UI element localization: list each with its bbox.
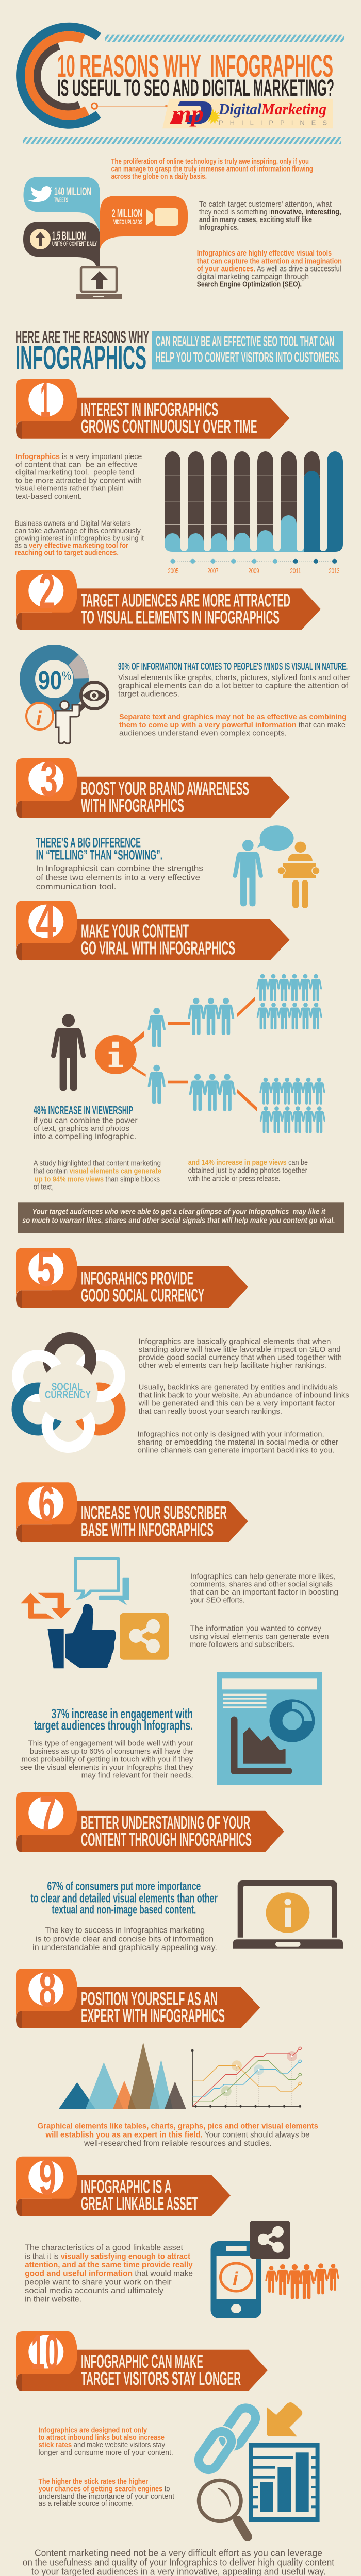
icon: magnifying glass [199, 2480, 248, 2537]
banner 4: 4 [36, 893, 56, 950]
banner 8: EXPERT WITH INFOGRAPHICS [81, 2005, 225, 2026]
icon: phone with share: i [233, 2268, 239, 2290]
bar chart: interest over time [165, 448, 343, 552]
text: reason 1 intro: visual elements rather than plain [15, 485, 124, 493]
icon: retweet arrows [21, 1593, 71, 1619]
text: stick rates: understand the importance of your content [38, 2493, 174, 2501]
banner 9: 9 [39, 2149, 56, 2206]
text: inbound links [38, 2427, 173, 2457]
text: study right column: and 14% increase in page views can be [188, 1159, 308, 1167]
text: stick rates: The higher the stick rates the higher [38, 2478, 148, 2486]
text: stick rates [38, 2478, 174, 2508]
text: separate text and graphics: audiences understand even complex concepts. [119, 730, 287, 738]
text: social signals: your SEO efforts. [190, 1597, 244, 1605]
banner 3: WITH INFOGRAPHICS [81, 795, 184, 816]
text: closing paragraph: Content marketing need not be a very difficult effort as you can leverage [35, 2548, 322, 2558]
donut chart: 90 percent: % [62, 669, 71, 682]
text: 90 percent visual [118, 660, 351, 699]
text: inbound links: stick rates and make website visitors stay [38, 2441, 166, 2449]
text: 37 percent engagement: This type of engagement will bode well with your [28, 1739, 193, 1748]
text: linkable asset: in their website. [25, 2295, 81, 2304]
text: 37 percent engagement: may find relevant for their needs. [81, 1772, 193, 1780]
text: study left column: A study highlighted that content marketing [34, 1159, 161, 1167]
diagram: social currency rings: SOCIAL [52, 1381, 83, 1393]
banner 6 [16, 1475, 248, 1542]
text: 67 percent of consumers: to clear and detailed visual elements than other [30, 1891, 218, 1905]
diagram: social currency rings: CURRENCY [45, 1389, 91, 1400]
text: 90 percent visual: target audiences. [118, 690, 179, 699]
text: telling vs showing: In Infographicsit can combine the strengths [36, 865, 203, 873]
line chart [191, 2047, 301, 2108]
text: catch attention: Infographics. [199, 224, 239, 232]
text: 90 percent visual: Visual elements like graphs, charts, pictures, stylized fonts and other [118, 674, 351, 682]
text: separate text and graphics: Separate text and graphics may not be as effective as combining [119, 713, 347, 721]
text: linkable asset [25, 2243, 193, 2304]
text: 67 percent of consumers: is to provide clear and concise bits of information [36, 1935, 214, 1943]
text: reason 1 intro: of content that can be an effective [15, 461, 137, 469]
banner 4 [16, 893, 290, 960]
icon: laptop upload [76, 267, 122, 299]
text: stick rates: your chances of getting search engines to [38, 2485, 170, 2494]
text: study right column [188, 1159, 308, 1183]
icon: laptop with info [233, 1880, 343, 1949]
timeline: 2009 [249, 567, 259, 575]
stat bubble: tweets [23, 177, 100, 234]
text: 48 percent viewership: if you can combine the power [34, 1116, 138, 1125]
banner 7: 7 [39, 1785, 56, 1841]
text: visual tools [197, 249, 342, 289]
stat bubble: content units: UNITS OF CONTENT DAILY [52, 240, 97, 247]
text: social currency paragraph 1: standing alone will have little favorable impact on SEO and [139, 1346, 341, 1354]
text: social currency paragraph 2: that link back to your website. An abundance of inbound links [139, 1392, 349, 1400]
text: followers [190, 1624, 329, 1649]
text: reason 1 detail: Business owners and Digital Marketers [15, 520, 131, 528]
text: followers: The information you wanted to convey [190, 1624, 322, 1633]
callout: target audiences [18, 1202, 344, 1233]
heading: here are the reasons why infographics: HERE ARE THE REASONS WHY [15, 328, 149, 346]
banner 8: 8 [39, 1961, 56, 2018]
text: 37 percent engagement: most probability of getting in touch with you if they [22, 1755, 193, 1764]
text: 48 percent viewership: into a compelling Infographic. [34, 1133, 136, 1141]
timeline: 2013 [329, 567, 339, 575]
text: linkable asset: The characteristics of a good linkable asset [25, 2243, 184, 2252]
banner 10 [16, 2324, 268, 2391]
banner 9: GREAT LINKABLE ASSET [81, 2193, 198, 2214]
text: reason 1 detail: reaching out to target audiences. [15, 549, 119, 557]
icon: down-left arrow [267, 2402, 302, 2436]
text: social currency paragraph 3: online channels can generate important backlinks to you. [137, 1446, 335, 1454]
timeline: 2005 [168, 567, 178, 575]
text: social currency paragraph 3: Infographics not only is designed with your information, [137, 1430, 324, 1438]
text: separate text and graphics: them to come up with a very powerful information that can make [119, 721, 346, 730]
text: visual tools: that can capture the attention and imagination [197, 258, 342, 266]
banner 6: 6 [38, 1475, 55, 1531]
text: social currency paragraph 2: Usually, backlinks are generated by entities and individuals [139, 1383, 338, 1392]
text: social currency paragraph 2: that can really boost your search rankings. [139, 1408, 282, 1416]
hatch bar top [105, 35, 344, 42]
text: study right column: with the article or press release. [188, 1175, 280, 1183]
stat bubble: tweets: 140 MILLION [54, 185, 91, 198]
text: graphical elements: Graphical elements like tables, charts, graphs, pics and other visual elements [38, 2122, 318, 2131]
icon: orange crowd [265, 2263, 339, 2299]
heading: here are the reasons why infographics [15, 328, 149, 377]
diagram: viral sharing network [51, 974, 325, 1133]
text: reason 1 intro: Infographics is a very important piece [15, 453, 142, 461]
banner 9: INFOGRAPHIC IS A [81, 2176, 172, 2197]
text: catch attention [199, 200, 341, 232]
text: followers: using visual elements can generate even [190, 1633, 329, 1641]
icon: person with magnifier eye and info [26, 682, 108, 743]
hatch bar lower [23, 137, 341, 144]
icon: bar report [249, 2443, 320, 2522]
banner 10: 10 [31, 2324, 59, 2380]
text: 67 percent of consumers: 67% of consumers put more importance [47, 1879, 201, 1893]
stat bubble: content units [23, 222, 100, 267]
text: 37 percent engagement: business as up to 60% of consumers will have the [30, 1748, 193, 1756]
text: study left column [34, 1159, 161, 1192]
diagram: social currency rings [18, 1338, 120, 1447]
text: social currency paragraph 2 [138, 1383, 349, 1416]
banner 5: INFOGRAHICS PROVIDE [81, 1267, 193, 1289]
text: linkable asset: good and useful information that would make [25, 2269, 193, 2278]
intro text: across the globe on a daily basis. [111, 173, 207, 181]
text: inbound links: longer and consume more of your content. [38, 2449, 173, 2457]
text: linkable asset: is that it is visually satisfying enough to attract [25, 2252, 190, 2261]
text: 48 percent viewership: 48% INCREASE IN VIEWERSHIP [34, 1104, 133, 1117]
banner 8 [16, 1961, 260, 2028]
banner 5 [16, 1241, 248, 1308]
text: stick rates: as a reliable source of income. [38, 2500, 134, 2508]
text: study left column: up to 94% more views than simple blocks [35, 1175, 160, 1183]
text: closing paragraph [23, 2548, 334, 2576]
text: 37 percent engagement [20, 1706, 193, 1780]
text: visual tools: Infographics are highly effective visual tools [197, 249, 332, 258]
text: social currency paragraph 1: other web elements can help facilitate higher rankings. [139, 1362, 326, 1370]
text: social signals: that can be an important factor in boosting [190, 1588, 338, 1597]
text: social signals: comments, shares and other social signals [190, 1581, 333, 1589]
banner 7 [16, 1785, 284, 1852]
banner 6: BASE WITH INFOGRAPHICS [81, 1519, 214, 1540]
text: telling vs showing: THERE’S A BIG DIFFERENCE [36, 835, 141, 850]
timeline: 2011 [290, 567, 301, 575]
title rings [21, 27, 99, 124]
text: 48 percent viewership [34, 1104, 138, 1141]
text: reason 1 intro [15, 453, 142, 501]
text: visual tools: digital marketing campaign through [197, 273, 309, 281]
text: telling vs showing: of these two elements into a very effective [36, 873, 200, 882]
banner 6: INCREASE YOUR SUBSCRIBER [81, 1502, 227, 1523]
logo: Digital Marketing Philippines: PHILIPPINES [219, 119, 327, 127]
text: social currency paragraph 2: will be generated and this can be a very important factor [138, 1399, 335, 1408]
icon: thumbs up [47, 1604, 116, 1668]
banner 8: POSITION YOURSELF AS AN [81, 1988, 218, 2009]
banner 5: 5 [37, 1241, 55, 1297]
text: reason 1 detail: can take advantage of this continuously [15, 527, 141, 535]
banner 1: 1 [40, 372, 50, 428]
text: visual tools: Search Engine Optimization (SEO). [197, 281, 302, 289]
text: social currency paragraph 3: sharing or embedding the material in social media or other [137, 1438, 338, 1447]
text: catch attention: and in many cases, exciting stuff like [199, 216, 312, 224]
icon: share tile [120, 1613, 169, 1660]
title [57, 48, 334, 101]
banner 3 [16, 751, 290, 818]
text: 37 percent engagement: target audiences through Infographs. [34, 1718, 193, 1733]
icon: two people talking [233, 825, 320, 908]
text: separate text and graphics [119, 713, 347, 738]
text: study left column: that contain visual elements can generate [34, 1167, 161, 1176]
text: graphical elements: well-researched from reliable resources and studies. [84, 2139, 272, 2148]
text: linkable asset: people want to share your work on their [25, 2278, 172, 2286]
banner 9 [16, 2149, 231, 2216]
logo: Digital Marketing Philippines: Digital [218, 100, 261, 118]
text: reason 1 detail [15, 520, 144, 557]
intro text: can manage to grasp the truly immense amount of information flowing [111, 165, 313, 174]
text: catch attention: To catch target customers' attention, what [199, 200, 332, 209]
text: inbound links: Infographics are designed not only [38, 2427, 147, 2435]
text: visual tools: of your audiences. As well as drive a successful [197, 265, 341, 274]
intro text: The proliferation of online technology is truly awe inspiring, only if you [111, 158, 309, 166]
banner 10: INFOGRAPHIC CAN MAKE [81, 2351, 203, 2372]
text: catch attention: they need is something innovative, interesting, [199, 208, 341, 216]
text: 67 percent of consumers [30, 1879, 218, 1952]
stat bubble: video uploads: VIDEO UPLOADS [113, 218, 142, 226]
stat bubble: video uploads: 2 MILLION [112, 207, 142, 220]
donut chart: 90 percent: 90 [38, 666, 62, 695]
text: study left column: of text, [34, 1183, 54, 1192]
text: inbound links: to attract inbound links but also increase [38, 2434, 165, 2442]
text: followers: more followers and subscribers. [190, 1641, 295, 1649]
icon: report document [217, 1672, 322, 1785]
text: social currency paragraph 1: provide good social currency that when used together with [139, 1353, 342, 1362]
text: social signals [190, 1572, 338, 1605]
timeline [168, 559, 339, 575]
text: closing paragraph: on the usefulness and quality of your Infographics to deliver high quality content [23, 2557, 334, 2567]
text: reason 1 intro: to be more attracted by content with [15, 477, 142, 485]
text: 37 percent engagement: see the visual elements in your Infographs that they [20, 1764, 193, 1772]
icon: chain link [195, 2404, 259, 2473]
stat bubble: video uploads [100, 196, 188, 249]
text: 67 percent of consumers: in understandable and graphically appealing way. [32, 1943, 217, 1952]
text: reason 1 detail: growing interest in Infographics by using it [15, 534, 144, 543]
text: linkable asset: attention, and at the same time provide really [25, 2261, 193, 2269]
banner 1 [16, 372, 290, 439]
icon: comment bubbles [74, 1557, 129, 1605]
icon: phone with share [210, 2221, 290, 2318]
banner 4: MAKE YOUR CONTENT [81, 920, 189, 941]
panel: seo tool callout [152, 331, 343, 369]
text: reason 1 intro: digital marketing tool. people tend [15, 469, 134, 477]
text: social currency paragraph 1 [139, 1337, 342, 1370]
text: telling vs showing [36, 835, 203, 891]
banner 3: 3 [40, 751, 58, 807]
stat bubble: tweets: TWEETS [54, 196, 68, 204]
callout: target audiences: Your target audiences who were able to get a clear glimpse of your Infographics may like it [32, 1208, 326, 1216]
text: 67 percent of consumers: The key to success in Infographics marketing [45, 1926, 205, 1935]
logo: Digital Marketing Philippines: Marketing [261, 100, 326, 118]
logo: Digital Marketing Philippines [162, 99, 333, 128]
text: 37 percent engagement: 37% increase in engagement with [52, 1706, 193, 1721]
banner 5: GOOD SOCIAL CURRENCY [81, 1284, 204, 1306]
text: reason 1 intro: text-based content. [15, 493, 82, 501]
text: social currency paragraph 1: Infographics are basically graphical elements that when [139, 1337, 331, 1346]
triangle chart [59, 2042, 186, 2109]
text: telling vs showing: communication tool. [36, 883, 116, 891]
icon: person with magnifier eye and info: i [36, 708, 42, 730]
timeline: 2007 [207, 567, 219, 575]
text: social currency paragraph 3 [137, 1430, 338, 1454]
logo: Digital Marketing Philippines: mp [172, 100, 204, 127]
pointer line to logo [92, 103, 168, 109]
text: 67 percent of consumers: textual and non-image based content. [52, 1903, 196, 1917]
banner 2 [16, 563, 321, 630]
heading: here are the reasons why infographics: INFOGRAPHICS [15, 339, 146, 377]
banner 1: INTEREST IN INFOGRAPHICS [81, 399, 218, 420]
banner 2: 2 [39, 563, 55, 619]
text: 90 percent visual: graphical elements can do a lot better to capture the attention of [118, 682, 349, 690]
text: telling vs showing: IN “TELLING” THAN “SHOWING”. [36, 847, 162, 862]
intro text [111, 158, 313, 181]
text: graphical elements: will establish you as an expert in this field. Your content should always be [45, 2130, 310, 2139]
donut chart: 90 percent [20, 645, 89, 714]
text: linkable asset: social media accounts and ultimately [25, 2286, 163, 2295]
text: reason 1 detail: as a very effective marketing tool for [15, 541, 128, 550]
text: social signals: Infographics can help generate more likes, [190, 1572, 336, 1581]
text: study right column: obtained just by adding photos together [188, 1167, 307, 1175]
stat bubble: content units: 1.5 BILLION [52, 229, 86, 242]
text: 48 percent viewership: of text, graphics and photos [34, 1125, 129, 1133]
text: graphical elements [38, 2122, 318, 2148]
